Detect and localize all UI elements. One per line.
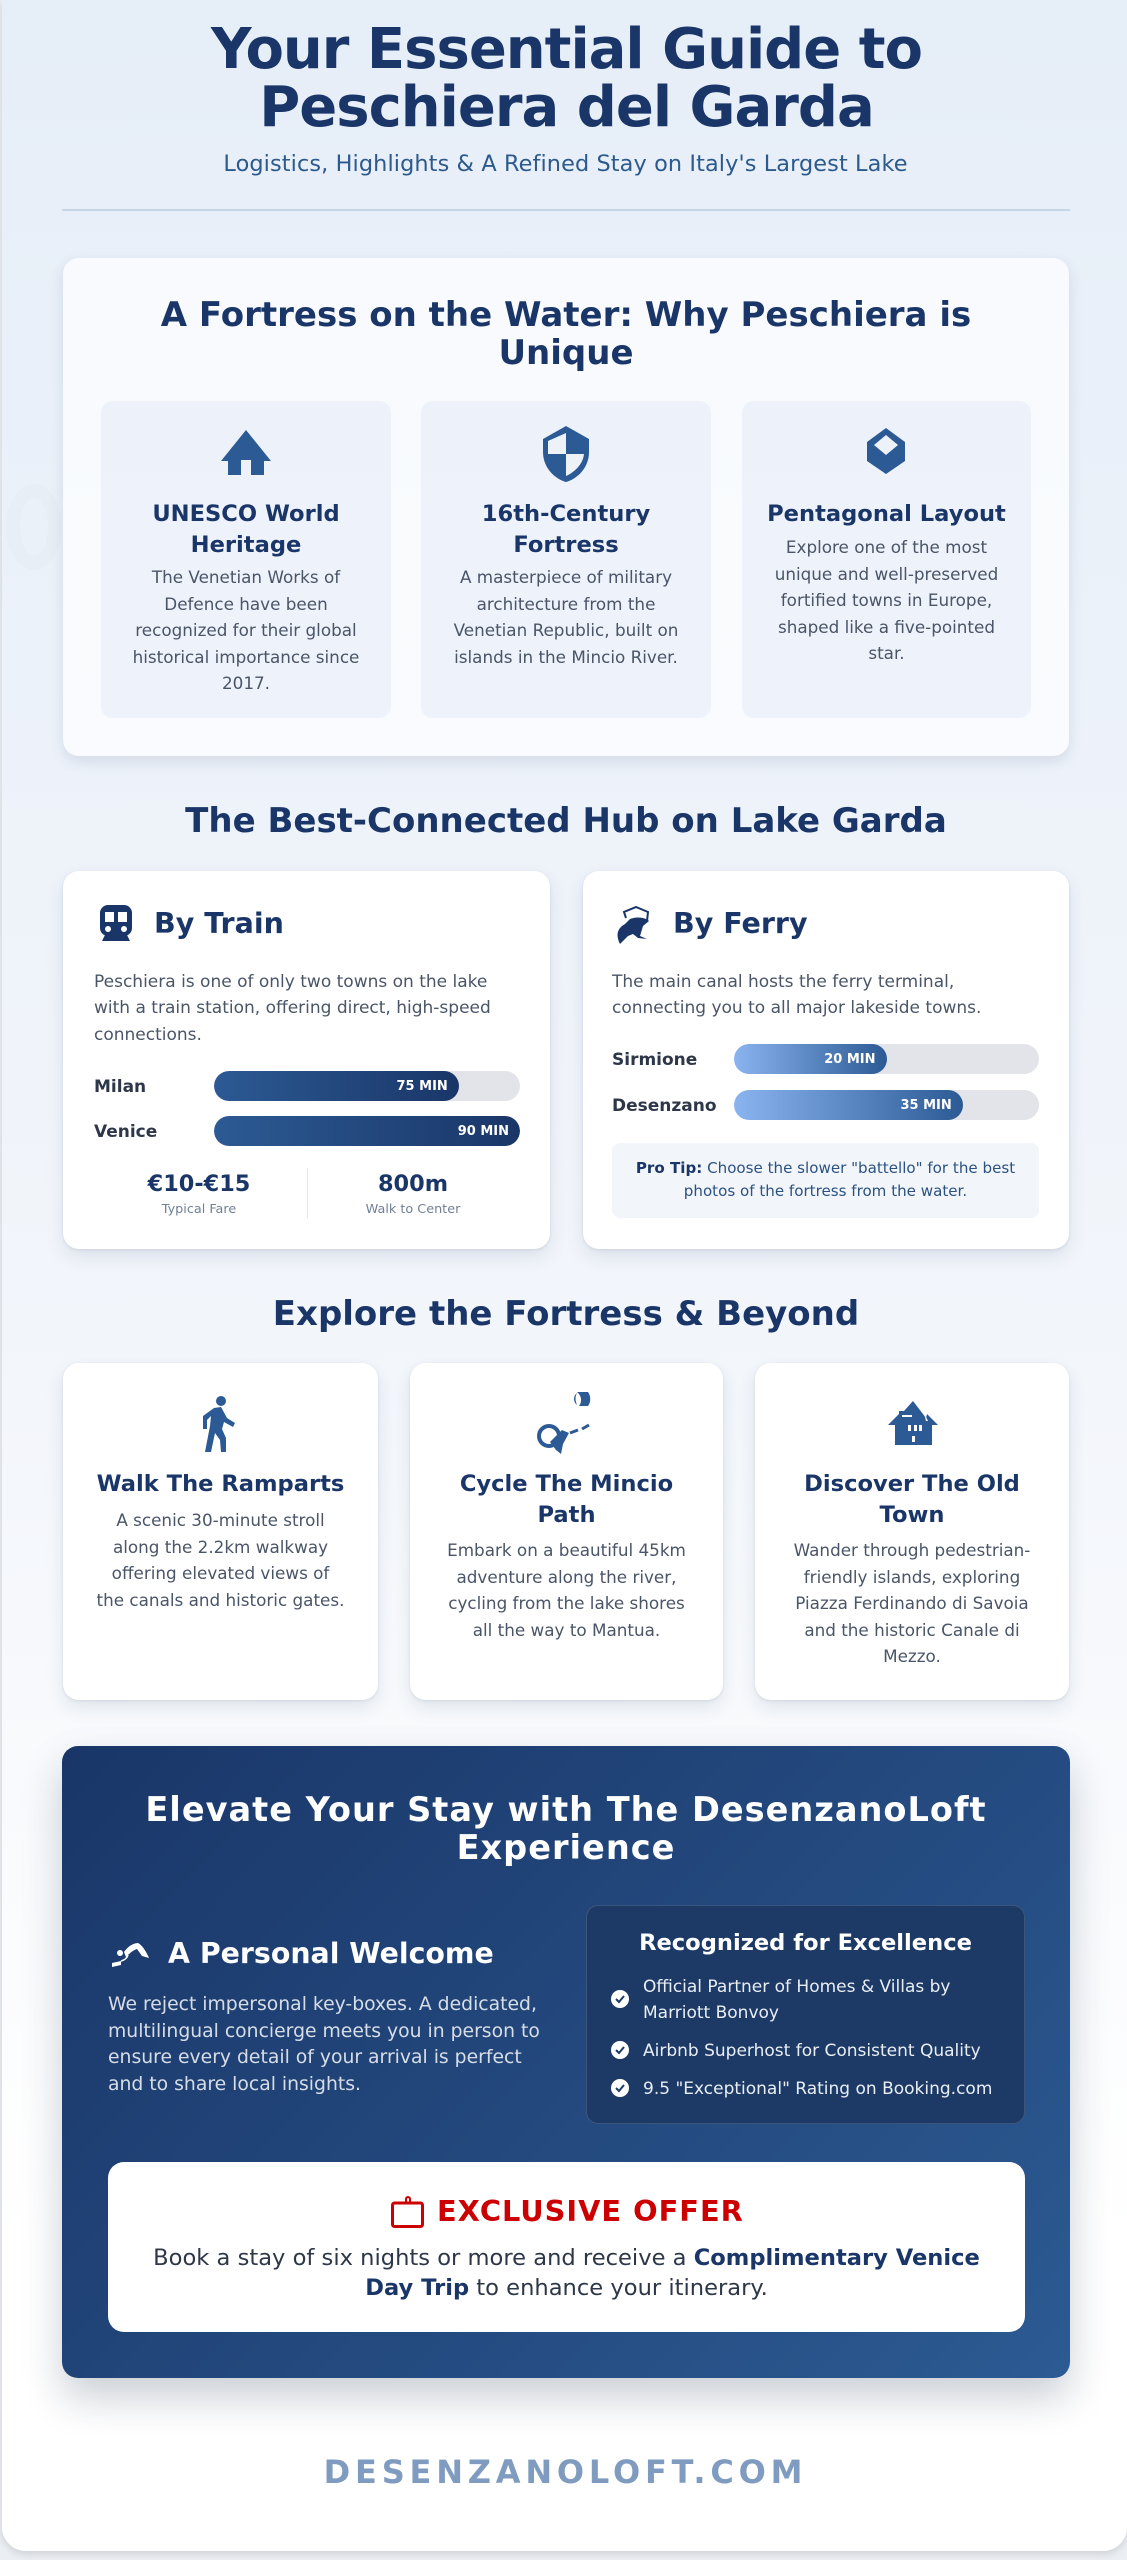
text (447, 1540, 686, 1640)
icon: cycle (537, 1392, 590, 1454)
footer brand: DESENZANOLOFT.COM (324, 2453, 807, 2491)
card text: star. (868, 643, 905, 663)
text: along the 2.2km walkway (113, 1536, 328, 1556)
card: old town (755, 1363, 1069, 1700)
bar: Sirmione: 20 MIN (824, 1052, 876, 1067)
welcome text: multilingual concierge meets you in person to (108, 2020, 540, 2042)
title: Path (537, 1502, 596, 1528)
section heading: fortress (161, 295, 971, 373)
text (96, 1510, 344, 1610)
pro tip: photos of the fortress from the water. (684, 1182, 967, 1200)
section heading: explore: Explore the Fortress & Beyond (273, 1294, 859, 1334)
card title: UNESCO World (152, 501, 340, 527)
offer text: Day Trip to enhance your itinerary. (365, 2275, 768, 2301)
icon: walker (203, 1396, 235, 1452)
text: A scenic 30-minute stroll (116, 1510, 325, 1530)
bar: Desenzano (734, 1090, 1039, 1120)
title: Peschiera del Garda (259, 75, 874, 140)
text: Embark on a beautiful 45km (447, 1540, 686, 1560)
bar: Desenzano: 35 MIN (900, 1098, 952, 1113)
feature: fortress (421, 401, 711, 718)
description (612, 972, 981, 1018)
icon: check (611, 2079, 629, 2097)
description: The main canal hosts the ferry terminal, (612, 972, 954, 992)
description (94, 972, 491, 1045)
description: with a train station, offering direct, high-speed (94, 998, 491, 1018)
heading: personal welcome: A Personal Welcome (168, 1937, 494, 1970)
stat label: Walk to Center (366, 1202, 460, 1217)
icon: home (221, 430, 271, 475)
text: the canals and historic gates. (97, 1590, 344, 1610)
welcome text: We reject impersonal key-boxes. A dedicated, (108, 1994, 537, 2015)
panel: exclusive offer (108, 2162, 1025, 2332)
card text: historical importance since (133, 646, 359, 666)
subtitle: Logistics, Highlights & A Refined Stay on Italy's Largest Lake (223, 151, 908, 177)
text: and the historic Canale di (804, 1620, 1020, 1640)
pro tip (612, 1143, 1039, 1218)
title (804, 1471, 1020, 1528)
heading: elevate: Experience (457, 1828, 675, 1867)
stat: fare: €10-€15 (148, 1171, 250, 1197)
icon: town house (888, 1401, 938, 1445)
icon: check (611, 1990, 629, 2008)
welcome text: ensure every detail of your arrival is perfect (108, 2047, 522, 2068)
text: adventure along the river, (456, 1566, 676, 1586)
credential: Marriott Bonvoy (643, 2003, 779, 2023)
card text: Venetian Republic, built on (454, 620, 678, 640)
card text (133, 567, 359, 693)
icon: cube (867, 428, 905, 474)
card text: islands in the Mincio River. (454, 646, 678, 666)
panel: DesenzanoLoft experience (62, 1746, 1070, 2378)
text: Piazza Ferdinando di Savoia (795, 1593, 1029, 1613)
card text: unique and well-preserved (775, 564, 998, 584)
stat: walk: 800m (378, 1171, 448, 1197)
card text (775, 537, 998, 663)
text: offering elevated views of (112, 1563, 329, 1583)
title: Discover The Old (804, 1471, 1020, 1497)
pro tip: Pro Tip: Choose the slower "battello" for the best (636, 1159, 1015, 1177)
stat label: Typical Fare (162, 1202, 236, 1217)
text (794, 1540, 1030, 1666)
title (460, 1471, 673, 1528)
offer text: Book a stay of six nights or more and receive a Complimentary Venice (153, 2245, 980, 2271)
welcome text: and to share local insights. (108, 2074, 361, 2094)
card text: Explore one of the most (786, 537, 987, 557)
icon: train (100, 905, 132, 941)
offer heading: EXCLUSIVE OFFER (437, 2194, 744, 2228)
welcome text (108, 1994, 540, 2094)
card text: recognized for their global (135, 620, 357, 640)
icon: ferry (618, 906, 650, 944)
feature: pentagonal (742, 401, 1031, 718)
panel: by ferry (583, 871, 1069, 1249)
description: Peschiera is one of only two towns on the lake (94, 972, 487, 992)
feature: UNESCO (101, 401, 391, 718)
card text: A masterpiece of military (460, 567, 672, 587)
bar: Venice (214, 1116, 520, 1146)
bar: Venice: 90 MIN (458, 1124, 509, 1139)
bar label: Desenzano (612, 1096, 717, 1116)
bar label: Milan (94, 1077, 146, 1097)
heading: By Ferry (673, 907, 808, 940)
panel: why Peschiera is unique (63, 258, 1069, 756)
icon: shield (543, 426, 589, 482)
text: Mezzo. (883, 1646, 941, 1666)
card: walk (63, 1363, 378, 1700)
card text: The Venetian Works of (152, 567, 340, 587)
bar label: Venice (94, 1122, 157, 1142)
card title: 16th-Century (482, 501, 650, 527)
recognized title: Recognized for Excellence (639, 1930, 972, 1956)
description: connections. (94, 1025, 202, 1045)
icon: check (611, 2041, 629, 2059)
card title: Pentagonal Layout (767, 501, 1006, 527)
heading: By Train (154, 907, 284, 940)
offer text (153, 2245, 980, 2301)
card: cycle (410, 1363, 723, 1700)
card text: fortified towns in Europe, (781, 590, 992, 610)
title (210, 17, 922, 140)
card text: 2017. (222, 673, 270, 693)
title: Town (880, 1502, 944, 1528)
header (210, 17, 922, 177)
credential: 9.5 "Exceptional" Rating on Booking.com (643, 2079, 992, 2099)
card text (454, 567, 678, 666)
card title: Heritage (191, 532, 301, 558)
bar: Sirmione (734, 1044, 1039, 1074)
description: connecting you to all major lakeside towns. (612, 998, 981, 1018)
bar: Milan (214, 1071, 520, 1101)
card title (482, 501, 650, 558)
card title: Fortress (513, 532, 619, 558)
heading: elevate (145, 1790, 987, 1867)
text: cycling from the lake shores (448, 1593, 685, 1613)
bar: Milan: 75 MIN (397, 1079, 448, 1094)
icon: gift (391, 2196, 424, 2228)
card text: shaped like a five-pointed (778, 616, 995, 636)
panel: recognized (586, 1905, 1025, 2124)
panel: by train (63, 871, 550, 1249)
heading: elevate: Elevate Your Stay with The DesenzanoLoft (145, 1790, 987, 1829)
text: friendly islands, exploring (804, 1566, 1020, 1586)
text: all the way to Mantua. (473, 1620, 660, 1640)
text: Wander through pedestrian- (794, 1540, 1030, 1560)
section heading: fortress: Unique (498, 333, 634, 373)
title: Walk The Ramparts (97, 1471, 344, 1497)
credential: Airbnb Superhost for Consistent Quality (643, 2041, 981, 2061)
icon: handshake (112, 1943, 149, 1967)
title: Cycle The Mincio (460, 1471, 673, 1497)
credential (643, 1977, 950, 2023)
card text: architecture from the (477, 594, 655, 614)
section heading: connections: The Best-Connected Hub on Lake Garda (185, 801, 947, 841)
card text: Defence have been (164, 594, 328, 614)
credential: Official Partner of Homes & Villas by (643, 1977, 950, 1997)
title: Your Essential Guide to (211, 17, 922, 82)
section heading: fortress: A Fortress on the Water: Why Peschiera is (161, 295, 971, 335)
card title (152, 501, 340, 558)
bar label: Sirmione (612, 1050, 697, 1070)
